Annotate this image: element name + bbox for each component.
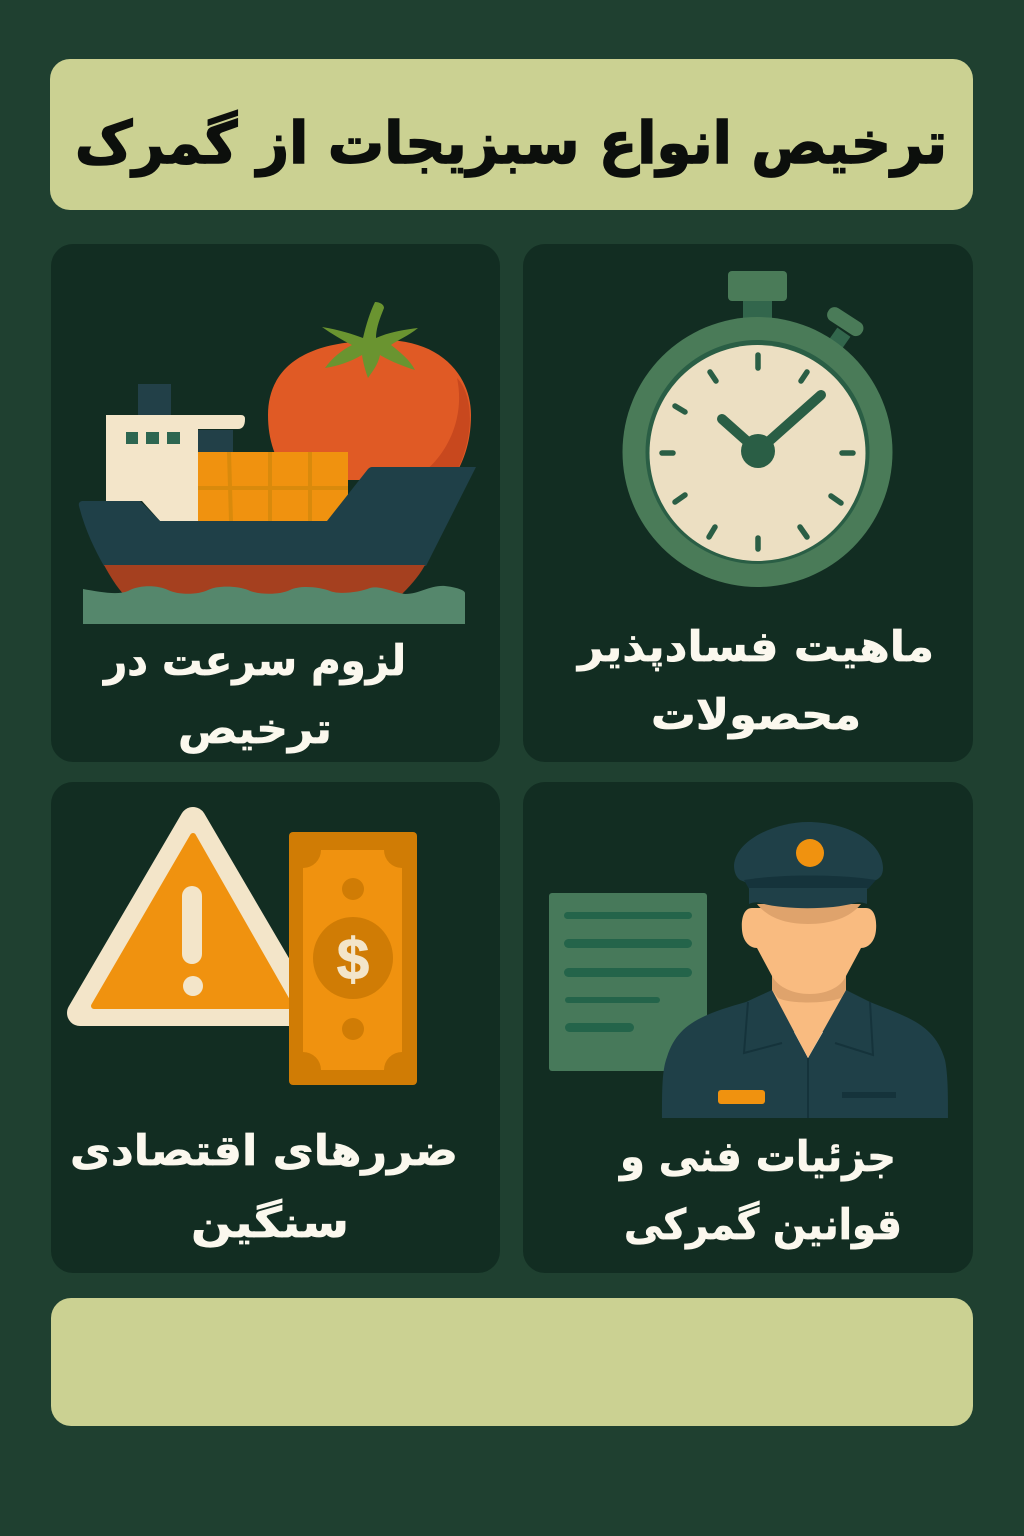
label: need for speed: لزوم سرعت در <box>102 636 406 686</box>
icon: stopwatch <box>622 271 892 587</box>
panel: technical details <box>523 782 973 1273</box>
title banner <box>50 59 973 210</box>
label: economic losses: سنگین <box>191 1198 349 1248</box>
label: economic losses: ضررهای اقتصادی <box>70 1126 458 1176</box>
icon: banknote <box>289 832 417 1085</box>
label: technical details <box>618 1132 902 1250</box>
panel: need for speed <box>51 244 500 762</box>
label: need for speed: ترخیص <box>178 704 332 754</box>
icon: warning triangle <box>80 820 306 1013</box>
label: technical details: جزئیات فنی و <box>618 1132 896 1182</box>
label: need for speed <box>102 636 406 754</box>
label: perishable: محصولات <box>651 690 861 740</box>
footer banner <box>51 1298 973 1426</box>
icon: banknote: $ <box>337 927 369 992</box>
icon: customs officer <box>662 822 948 1118</box>
icon: tomato and ship <box>79 302 476 624</box>
label: perishable: ماهیت فسادپذیر <box>576 622 934 672</box>
label: perishable <box>576 622 934 740</box>
label: technical details: قوانین گمرکی <box>624 1200 902 1250</box>
label: economic losses <box>70 1126 458 1248</box>
panel: economic losses <box>51 782 500 1273</box>
panel: perishable nature <box>523 244 973 762</box>
icon: document <box>549 893 707 1071</box>
title banner: ترخیص انواع سبزیجات از گمرک <box>75 109 947 178</box>
